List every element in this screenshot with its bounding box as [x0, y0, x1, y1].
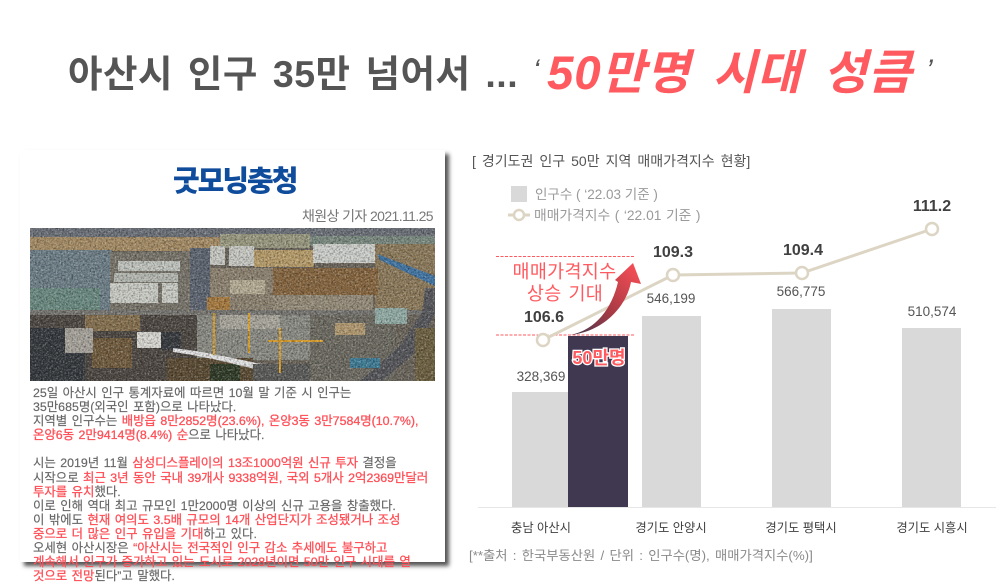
combo chart: [469, 186, 996, 563]
legend: 인구수 ( ‘22.03 기준 ): [535, 187, 658, 202]
category labels: 경기도 평택시: [765, 521, 837, 535]
bar value labels: 510,574: [908, 304, 957, 319]
dashed guide lines: [496, 256, 635, 335]
legend: 매매가격지수 ( ‘22.01 기준 ): [534, 208, 700, 223]
arrow: rising index: [570, 263, 641, 335]
index value labels: 106.6: [524, 309, 564, 326]
label: 500k: 50만명: [572, 348, 626, 368]
bar value labels: 328,369: [517, 369, 565, 384]
baseline: [478, 506, 996, 508]
article text: 25일 아산시 인구 통계자료에 따르면 10월 말 기준 시 인구는: [33, 386, 351, 400]
aerial photo: [30, 228, 435, 381]
article text: 투자를 유치했다.: [33, 485, 121, 499]
article text: 것으로 전망된다”고 말했다.: [33, 569, 175, 583]
population bars: [512, 309, 961, 507]
index line: [537, 223, 938, 346]
byline: 채원상 기자 2021.11.25: [302, 208, 433, 224]
legend: [508, 186, 700, 223]
article text: [33, 386, 428, 583]
category labels: [511, 521, 968, 535]
highlight bar: 500k: [568, 336, 628, 507]
title: ’: [926, 54, 933, 87]
index value labels: 111.2: [913, 198, 951, 215]
index value labels: 109.3: [653, 244, 693, 261]
source note: [**출처 : 한국부동산원 / 단위 : 인구수(명), 매매가격지수(%)]: [469, 548, 813, 563]
callout: index rise expected: 상승 기대: [527, 283, 603, 304]
bar value labels: 566,775: [777, 284, 825, 299]
article text: 시는 2019년 11월 삼성디스플레이의 13조1000억원 신규 투자 결정을: [33, 456, 397, 470]
chart heading: [ 경기도권 인구 50만 지역 매매가격지수 현황]: [472, 153, 750, 169]
title: [68, 47, 933, 100]
callout: index rise expected: 매매가격지수: [513, 261, 616, 282]
article text: 이 밖에도 현재 여의도 3.5배 규모의 14개 산업단지가 조성됐거나 조성: [33, 513, 400, 527]
title: ‘: [533, 54, 540, 87]
newspaper logo: 굿모닝충청: [173, 166, 296, 198]
article text: 이로 인해 역대 최고 규모인 1만2000명 이상의 신규 고용을 창출했다.: [33, 499, 396, 513]
category labels: 경기도 안양시: [635, 521, 707, 535]
bar value labels: [517, 284, 957, 384]
category labels: 경기도 시흥시: [896, 521, 968, 535]
title: 아산시 인구 35만 넘어서 ...: [68, 53, 518, 95]
index value labels: 109.4: [783, 242, 823, 259]
category labels: 충남 아산시: [511, 521, 571, 535]
article text: 오세현 아산시장은 “아산시는 전국적인 인구 감소 추세에도 불구하고: [33, 541, 387, 555]
panel: news article: [20, 150, 445, 562]
article text: 지역별 인구수는 배방읍 8만2852명(23.6%), 온양3동 3만7584명(10.7%),: [33, 414, 418, 428]
bar value labels: 546,199: [647, 291, 695, 306]
article text: 중으로 더 많은 인구 유입을 기대하고 있다.: [33, 527, 257, 541]
index value labels: [524, 198, 951, 326]
article text: 시작으로 최근 3년 동안 국내 39개사 9338억원, 국외 5개사 2억2369만달러: [33, 471, 428, 485]
title: 50만명 시대 성큼: [547, 47, 912, 100]
article text: 계속해서 인구가 증가하고 있는 도시로 2028년이면 50만 인구 시대를 열: [33, 555, 411, 569]
callout: index rise expected: [513, 261, 616, 304]
article text: 35만685명(외국인 포함)으로 나타났다.: [33, 400, 236, 414]
article text: 온양6동 2만9414명(8.4%) 순으로 나타났다.: [33, 428, 264, 442]
